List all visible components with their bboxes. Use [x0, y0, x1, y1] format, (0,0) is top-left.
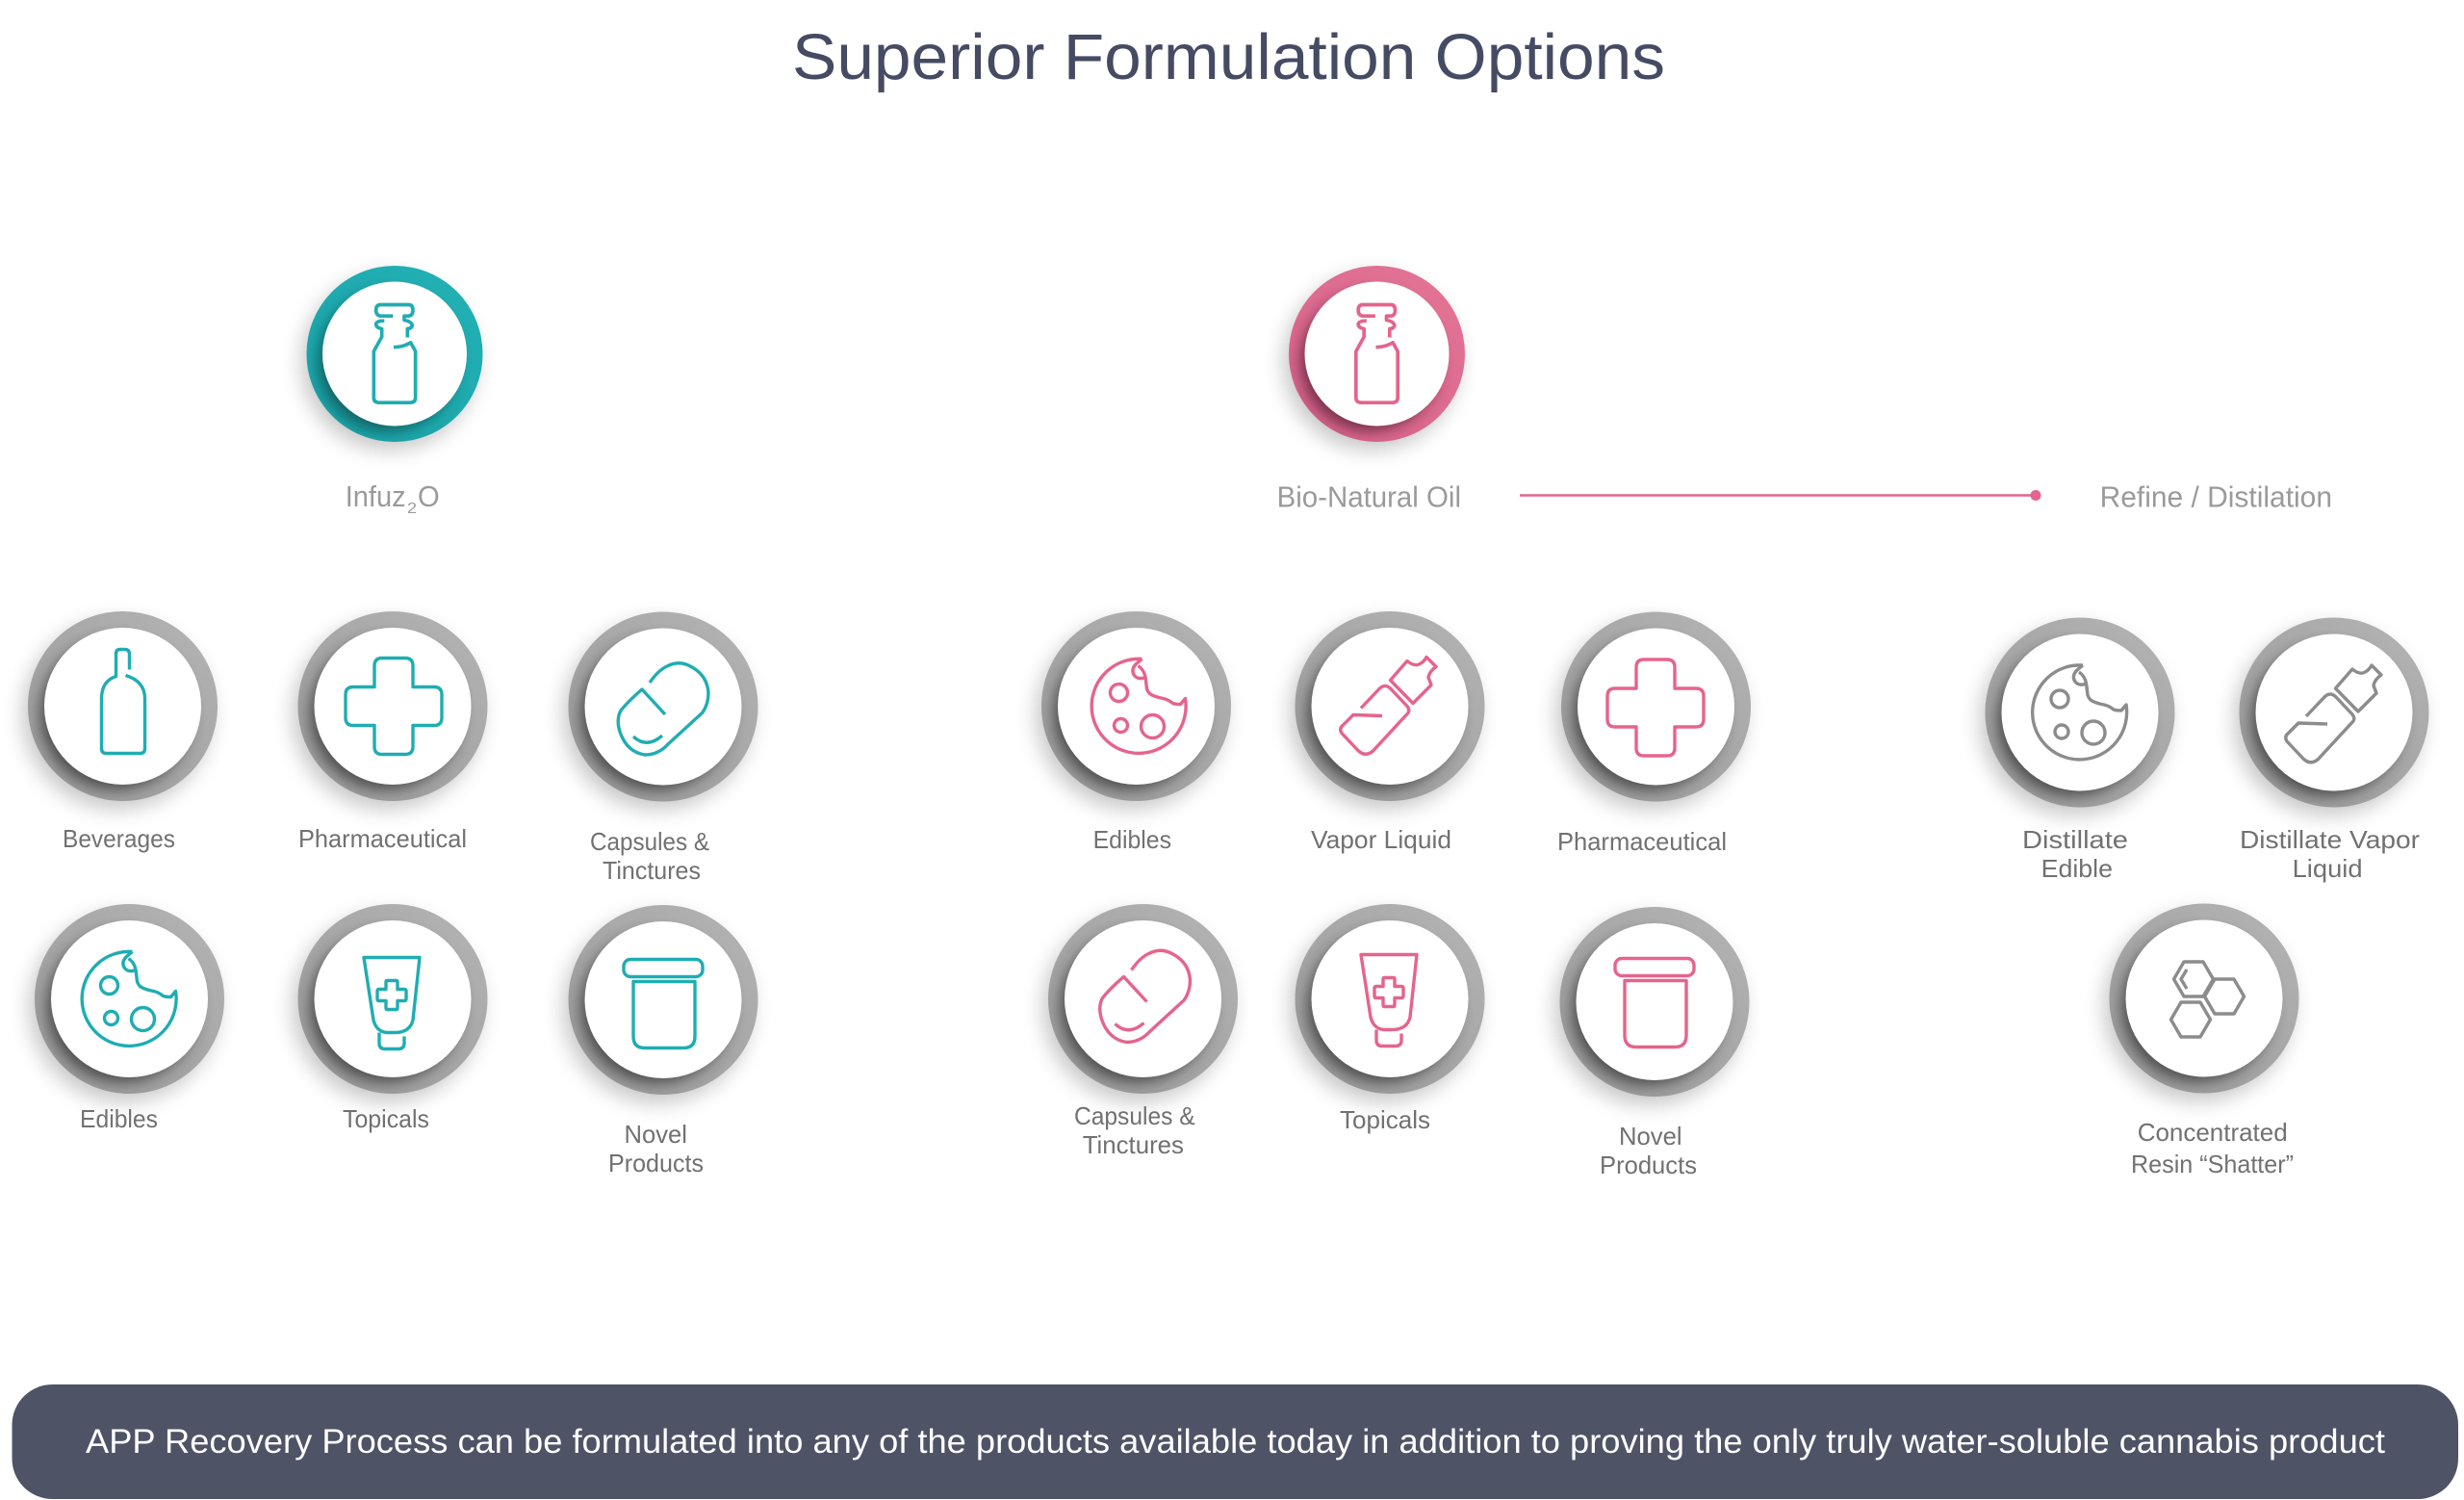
label	[2240, 825, 2420, 883]
item: Novel Products pink	[1554, 907, 1750, 1179]
label: Capsules &	[590, 827, 709, 856]
icon: cookie	[1091, 659, 1186, 753]
label: Infuz2O: 2	[407, 501, 417, 517]
item: Distillate Vapor Liquid	[2234, 618, 2429, 883]
arrow: connector to refine	[1520, 490, 2040, 501]
label: Novel	[624, 1120, 687, 1149]
label: Infuz2O: O	[418, 479, 440, 513]
label: Edibles	[80, 1104, 158, 1133]
icon: tube	[364, 957, 420, 1049]
label: Liquid	[2293, 854, 2363, 883]
label: Distillate	[2022, 825, 2128, 854]
icon: cookie	[82, 951, 176, 1046]
label: Novel	[1619, 1122, 1682, 1151]
item: Beverages	[23, 611, 218, 853]
label: Distillate Vapor	[2240, 825, 2420, 854]
label: Vapor Liquid	[1311, 825, 1451, 854]
label: Edibles	[1093, 825, 1171, 854]
panel: Bio-Natural Oil header	[1277, 266, 1465, 514]
label: Products	[1600, 1151, 1697, 1179]
label: Tinctures	[603, 856, 701, 885]
icon: bottle pink	[1356, 305, 1398, 402]
icon: dropper bottle	[2286, 665, 2381, 763]
label	[1074, 1101, 1195, 1159]
label	[2022, 825, 2128, 883]
icon: cross	[1607, 659, 1704, 756]
icon: cookie	[2033, 665, 2127, 760]
item: Vapor Liquid pink	[1290, 611, 1484, 854]
label: Infuz2O: Infuz	[346, 479, 406, 513]
icon: dropper bottle	[1341, 657, 1436, 754]
item: Pharmaceutical teal	[293, 611, 487, 853]
item: Distillate Edible	[1980, 618, 2175, 883]
item: Concentrated Resin Shatter	[2104, 903, 2298, 1178]
icon: tube	[1361, 955, 1417, 1046]
label	[590, 827, 709, 885]
icon: jar	[1615, 959, 1694, 1047]
icon: bottle teal	[373, 305, 416, 402]
item: Novel Products teal	[563, 905, 758, 1177]
icon: cross	[346, 659, 442, 755]
label: Concentrated	[2138, 1118, 2288, 1147]
icon: hexagons	[2171, 962, 2245, 1037]
label	[1600, 1122, 1697, 1179]
item: Topicals pink	[1290, 904, 1484, 1134]
item: Pharmaceutical pink	[1555, 612, 1751, 856]
label: Bio-Natural Oil: Bio-Natural Oil	[1277, 479, 1461, 514]
item: Topicals teal	[293, 904, 487, 1133]
label: Products	[608, 1149, 704, 1177]
label: Pharmaceutical	[1557, 827, 1727, 856]
panel: Infuz2O header	[301, 266, 483, 517]
label	[2131, 1118, 2294, 1178]
label: Tinctures	[1083, 1130, 1184, 1159]
label: Resin “Shatter”	[2131, 1150, 2294, 1178]
item: Edibles pink	[1036, 611, 1231, 854]
label: Infuz2O	[346, 479, 440, 517]
icon: jar	[624, 959, 703, 1047]
label: Refine / Distilation: Refine / Distilation	[2100, 479, 2332, 514]
label	[608, 1120, 704, 1177]
item: Edibles teal	[29, 904, 224, 1133]
icon: bottle	[102, 649, 144, 753]
label: Edible	[2041, 854, 2113, 883]
label: Beverages	[63, 824, 175, 853]
icon: capsule	[1100, 950, 1190, 1042]
item: Capsules and Tinctures teal	[563, 612, 758, 885]
label: Topicals	[1340, 1105, 1430, 1134]
item: Capsules and Tinctures pink	[1043, 904, 1238, 1159]
callout: bottom banner: APP Recovery Process can be formulated into any of the products available today in addition to proving the only truly water-soluble cannabis product	[86, 1423, 2385, 1461]
label: Capsules &	[1074, 1101, 1195, 1130]
title: Superior Formulation Options	[792, 21, 1665, 93]
callout: bottom banner	[12, 1384, 2458, 1499]
label: Topicals	[343, 1104, 429, 1133]
label: Pharmaceutical	[298, 824, 467, 853]
icon: capsule	[618, 663, 708, 755]
